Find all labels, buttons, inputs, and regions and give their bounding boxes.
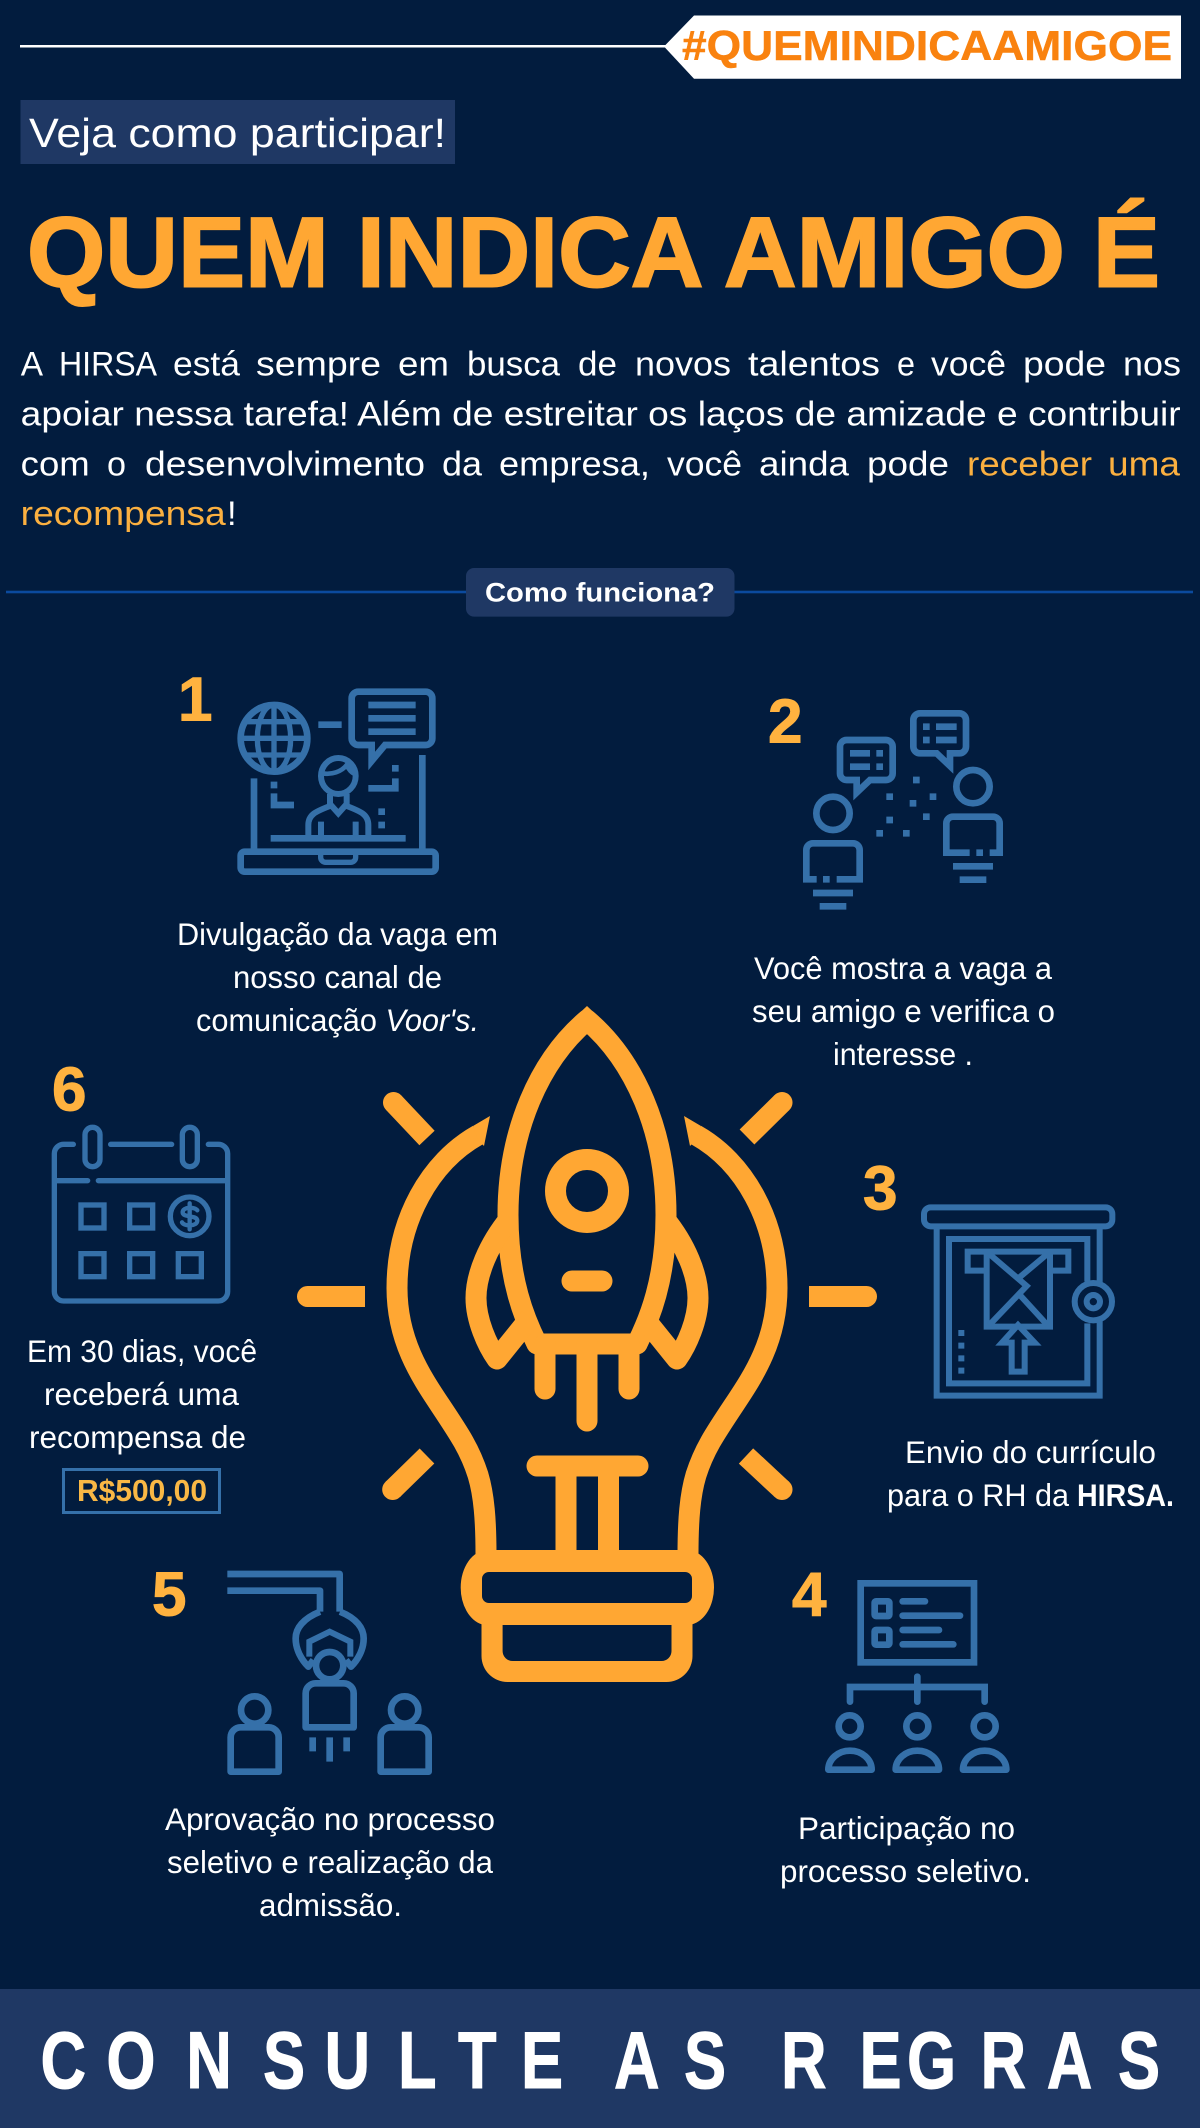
step 1 text: Divulgação da vaga em <box>177 916 498 952</box>
intro paragraph: HIRSA <box>59 346 157 384</box>
intro paragraph: novos <box>635 346 731 384</box>
intro paragraph <box>21 346 1181 533</box>
step 3 text <box>887 1434 1174 1513</box>
step 5 text <box>165 1801 495 1923</box>
intro paragraph: você <box>667 446 742 484</box>
intro paragraph: ainda <box>759 446 850 484</box>
step 3 text: Envio do currículo <box>905 1434 1156 1470</box>
number 2: 2 <box>768 688 802 756</box>
intro paragraph: com <box>21 446 90 484</box>
icon: selection board and candidates <box>828 1583 1006 1770</box>
intro paragraph: em <box>398 346 449 384</box>
bottom banner <box>0 1989 1200 2128</box>
icon: calendar with dollar coin <box>54 1127 228 1301</box>
step 3 <box>863 1154 1174 1513</box>
bulb base <box>461 1550 714 1682</box>
number 1: 1 <box>178 666 212 734</box>
step 6 text <box>27 1333 257 1455</box>
intro paragraph: sempre <box>256 346 381 384</box>
central icon: rocket inside light bulb <box>297 1006 877 1682</box>
intro paragraph: você <box>931 346 1006 384</box>
step 2 text <box>752 950 1055 1072</box>
intro paragraph: e <box>897 346 915 384</box>
number 4: 4 <box>792 1560 827 1630</box>
step 2 text: seu amigo e verifica o <box>752 993 1055 1029</box>
icon: claw picking candidate <box>227 1574 429 1772</box>
bulb glass <box>397 1116 777 1555</box>
step 4 text: processo seletivo. <box>780 1853 1031 1889</box>
step 6 <box>27 1056 257 1512</box>
section heading pill: Como funciona? <box>485 578 715 608</box>
step 4 <box>780 1560 1031 1889</box>
intro paragraph: ! <box>227 495 237 533</box>
rocket <box>476 1006 698 1421</box>
step 4 text: Participação no <box>798 1810 1015 1846</box>
header rule <box>20 45 670 48</box>
step 2 <box>752 688 1055 1072</box>
intro paragraph: uma <box>1108 446 1181 484</box>
step 5 text: seletivo e realização da <box>167 1844 493 1880</box>
number 6: 6 <box>52 1056 86 1124</box>
step 6 text: Em 30 dias, você <box>27 1333 257 1369</box>
intro paragraph: da <box>442 446 483 484</box>
icon: two people talking <box>806 713 1000 906</box>
step 6 text: recompensa de <box>29 1419 246 1455</box>
intro paragraph: apoiar nessa tarefa! Além de estreitar os laços de amizade e contribuir <box>21 396 1181 434</box>
step 3 text: HIRSA. <box>1077 1477 1174 1513</box>
step 1 text: nosso canal de <box>233 959 442 995</box>
intro paragraph: receber <box>967 446 1092 484</box>
hashtag tag: #QUEMINDICAAMIGOE <box>682 22 1172 69</box>
subtitle badge: Veja como participar! <box>29 110 446 156</box>
intro paragraph: o <box>107 446 126 484</box>
hashtag tag <box>664 16 1181 79</box>
step 5 text: admissão. <box>259 1887 402 1923</box>
icon: presenter laptop with globe <box>241 692 436 872</box>
subtitle badge <box>20 100 455 164</box>
intro paragraph: busca <box>467 346 561 384</box>
number 5: 5 <box>152 1560 186 1630</box>
step 5 text: Aprovação no processo <box>165 1801 495 1837</box>
filament <box>537 1456 638 1476</box>
section heading pill <box>466 568 734 617</box>
step 5 <box>152 1560 495 1923</box>
intro paragraph: nos <box>1123 346 1181 384</box>
title: QUEM INDICA AMIGO É <box>27 196 1160 308</box>
intro paragraph: pode <box>1023 346 1106 384</box>
intro paragraph: pode <box>867 446 949 484</box>
rays <box>297 1092 877 1500</box>
step 1 text: comunicação Voor's. <box>196 1002 479 1038</box>
step 2 text: Você mostra a vaga a <box>754 950 1052 986</box>
step 1 <box>177 666 498 1038</box>
step 1 text <box>177 916 498 1038</box>
intro paragraph: está <box>173 346 241 384</box>
reward amount box: R$500,00 <box>77 1473 207 1508</box>
intro paragraph: empresa, <box>499 446 650 484</box>
section divider <box>6 591 1193 593</box>
icon: resume sent through a slot <box>924 1207 1112 1396</box>
number 3: 3 <box>863 1154 897 1224</box>
intro paragraph: recompensa <box>21 495 227 533</box>
intro paragraph: A <box>21 346 43 384</box>
step 4 text <box>780 1810 1031 1889</box>
step 6 text: receberá uma <box>44 1376 239 1412</box>
step 3 text: para o RH da <box>887 1477 1069 1513</box>
bottom banner: CONSULTE AS REGRAS <box>41 2016 1160 2106</box>
step 2 text: interesse . <box>833 1036 973 1072</box>
intro paragraph: talentos <box>748 346 880 384</box>
intro paragraph: de <box>578 346 617 384</box>
intro paragraph: desenvolvimento <box>145 446 425 484</box>
